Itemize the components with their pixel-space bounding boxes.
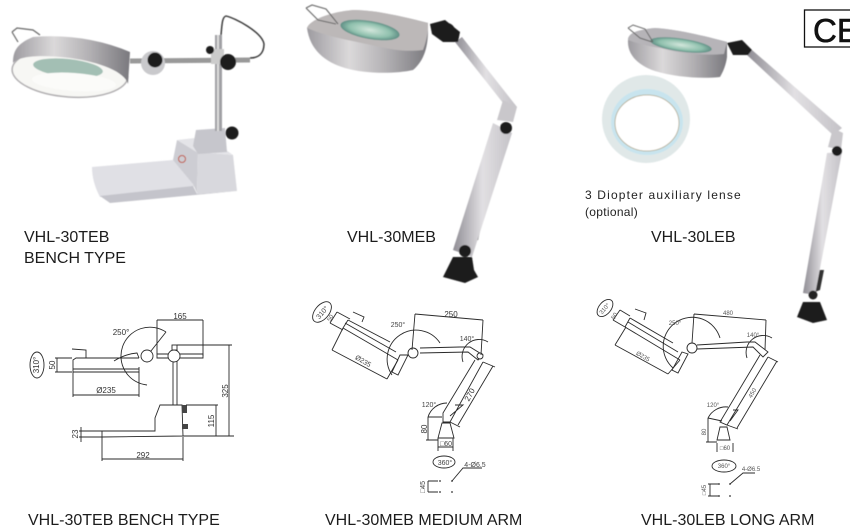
dimension 450: 450 — [748, 387, 759, 399]
dimension 115 — [186, 405, 218, 436]
140 degree arc: 140° — [460, 335, 474, 343]
elbow joint — [497, 100, 517, 134]
label: VHL-30MEB: VHL-30MEB — [347, 229, 436, 246]
dimension 50 — [327, 312, 350, 330]
rotation marker 360 — [712, 460, 736, 472]
dimension 50 — [611, 310, 630, 327]
label: VHL-30LEB: VHL-30LEB — [651, 229, 736, 246]
dimension 325: 325 — [221, 384, 230, 398]
vertical pole — [215, 35, 222, 131]
dimension 250: 250 — [444, 310, 458, 319]
dimension 50: 50 — [48, 360, 57, 369]
label: auxiliary lens note: (optional) — [585, 205, 638, 219]
caption: bench type: VHL-30TEB BENCH TYPE — [28, 512, 220, 529]
upper arm — [455, 37, 517, 113]
dimension 23: 23 — [71, 429, 80, 438]
lower arm and foot — [443, 123, 512, 283]
rotation marker 310: 310° — [32, 357, 41, 373]
technical drawing: medium arm — [309, 298, 495, 493]
label: VHL-30TEB bench type: BENCH TYPE — [24, 250, 126, 267]
auxiliary lens ring — [602, 75, 690, 163]
rotation marker 310: 310° — [599, 302, 612, 316]
dimension 50: 50 — [327, 314, 336, 323]
bench base — [92, 128, 237, 203]
arm joint and knob — [141, 46, 238, 140]
rotation marker 360: 360° — [718, 464, 731, 470]
dimension square 60: □60 — [720, 446, 731, 452]
rotation marker 310 — [309, 298, 335, 326]
clamp base — [438, 423, 454, 447]
lower arm outline — [443, 360, 483, 422]
black hinge — [727, 40, 752, 55]
base knobs — [182, 405, 188, 429]
140 degree arc — [746, 333, 772, 358]
dimension 80 — [420, 417, 438, 440]
120 degree arc — [422, 401, 447, 417]
label: VHL-30TEB bench type: VHL-30TEB — [24, 229, 109, 246]
dimension diameter 235: Ø235 — [635, 351, 651, 364]
dimension diameter 235 — [332, 328, 398, 379]
250 degree arc: 250° — [391, 321, 405, 329]
mounting holes — [702, 467, 761, 497]
mounting holes: □45 — [420, 481, 427, 493]
dimension diameter 235 — [73, 372, 139, 397]
dimension square 60 — [438, 441, 453, 451]
120 degree arc: 120° — [422, 401, 436, 409]
photo: VHL-30LEB long arm lamp — [628, 25, 843, 323]
dimension square 60: □60 — [440, 441, 452, 448]
250 degree arc: 250° — [113, 328, 129, 337]
rotation marker 360: 360° — [438, 459, 452, 467]
250 degree arc: 250° — [669, 321, 682, 327]
joint — [687, 343, 697, 353]
photo: VHL-30MEB medium arm lamp — [306, 5, 517, 283]
120 degree arc: 120° — [707, 403, 720, 409]
rotation marker 310 — [30, 352, 44, 378]
lamp head — [10, 28, 130, 101]
dimension 270: 270 — [463, 386, 477, 403]
mounting holes: 4-Ø6.5 — [464, 462, 486, 469]
dimension 80 — [702, 418, 717, 442]
250 degree arc — [387, 321, 440, 375]
mounting holes: 4-Ø6.5 — [742, 467, 761, 473]
120 degree arc — [707, 403, 728, 421]
label: auxiliary lens note: 3 Diopter auxiliary lense — [585, 188, 742, 202]
dimension 250 — [412, 310, 483, 355]
mounting holes — [420, 462, 486, 493]
base outline — [102, 405, 183, 437]
dimension 325 — [177, 345, 234, 436]
elbow joint — [828, 128, 843, 156]
lamp head outline — [625, 309, 688, 373]
dimension 292 — [102, 437, 183, 461]
dimension 50: 50 — [611, 312, 620, 321]
cable — [221, 16, 264, 58]
rotation marker 310 — [594, 296, 616, 320]
lamp head — [306, 5, 428, 73]
caption: medium arm: VHL-30MEB MEDIUM ARM — [325, 512, 522, 529]
upper arm — [747, 50, 842, 135]
dimension 480 — [692, 311, 766, 350]
lamp head outline — [343, 312, 408, 375]
dimension 480: 480 — [723, 311, 734, 317]
dimension 450 — [727, 357, 778, 429]
dimension diameter 235: Ø235 — [354, 354, 372, 369]
technical drawing: long arm — [594, 296, 778, 497]
lower arm outline — [720, 355, 768, 425]
technical drawing: bench type — [30, 312, 234, 461]
lower arm and foot — [797, 152, 842, 323]
lamp head outline — [72, 349, 139, 372]
250 degree arc — [113, 327, 166, 385]
dimension 165 — [157, 312, 203, 356]
dimension 270 — [450, 362, 495, 427]
stand outline — [157, 350, 203, 405]
140 degree arc: 140° — [747, 333, 760, 339]
dimension diameter 235 — [615, 327, 680, 374]
dimension 50 — [48, 358, 72, 372]
dimension 115: 115 — [207, 414, 216, 427]
arm outline — [420, 347, 483, 360]
rotation marker 360 — [433, 456, 455, 468]
dimension 292: 292 — [136, 451, 150, 460]
caption: long arm: VHL-30LEB LONG ARM — [641, 512, 814, 529]
joints — [141, 345, 180, 362]
dimension 80: 80 — [702, 428, 708, 435]
clamp base — [717, 427, 733, 452]
mounting holes: □45 — [702, 484, 708, 495]
rotation marker 310: 310° — [315, 304, 330, 321]
dimension diameter 235: Ø235 — [96, 386, 116, 395]
250 degree arc — [663, 317, 720, 368]
joints — [408, 348, 483, 359]
photo: VHL-30TEB bench lamp — [10, 16, 264, 203]
lamp head — [628, 25, 727, 78]
black hinge — [430, 20, 460, 42]
dimension 80: 80 — [420, 424, 429, 433]
dimension 23 — [71, 427, 102, 442]
140 degree arc — [460, 335, 488, 362]
dimension 165: 165 — [173, 312, 187, 321]
horizontal arm — [130, 57, 250, 64]
arm outline — [697, 342, 768, 357]
